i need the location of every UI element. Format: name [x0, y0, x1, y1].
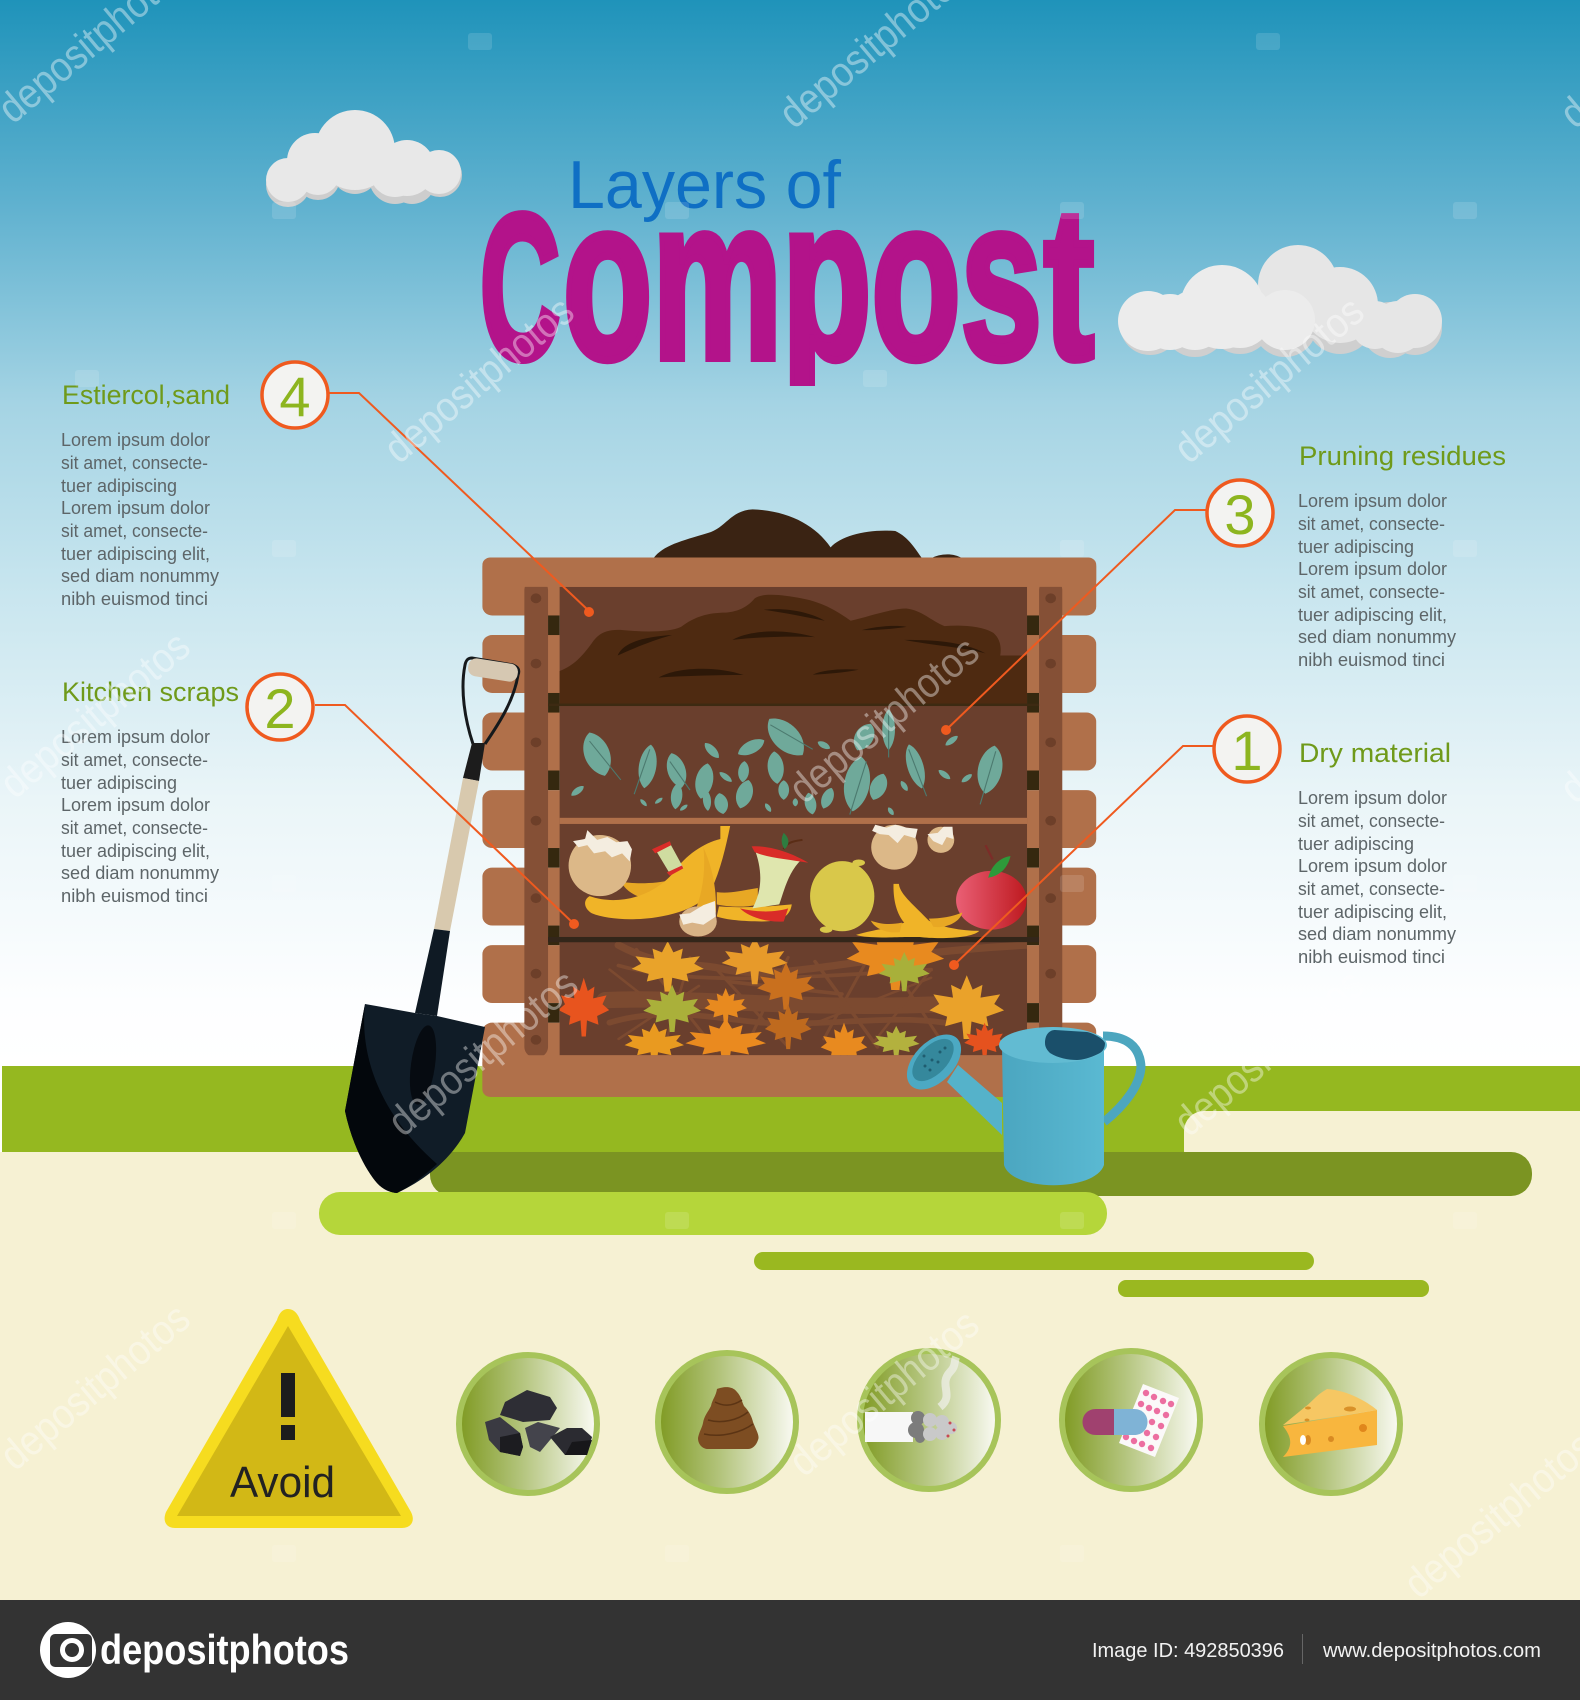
- badge 4: 4: [279, 365, 311, 428]
- apple: [956, 845, 1027, 930]
- callouts: leader lines and number badges: [247, 362, 1280, 969]
- avoid icon: cigarette: [860, 1351, 998, 1489]
- stock watermarks: depositphotos: [1165, 960, 1373, 1145]
- cloud right: [1118, 245, 1442, 358]
- leader 4: [329, 393, 593, 616]
- layer 1: dry material: [560, 942, 1027, 1056]
- stock watermarks: depositphotos: [379, 960, 587, 1145]
- can body: [1002, 1046, 1104, 1185]
- inner rails with gap blocks: [548, 615, 1039, 1023]
- wood bottom plank over interior: [482, 1055, 1096, 1097]
- avoid label: Avoid: [230, 1458, 335, 1507]
- footer logo wordmark: depositphotos: [100, 1626, 349, 1673]
- body: Lorem ipsum dolor: [1298, 559, 1447, 579]
- can opening: [1045, 1030, 1105, 1060]
- body: Lorem ipsum dolor: [1298, 788, 1447, 808]
- layer dividers: [548, 704, 1039, 942]
- body: Lorem ipsum dolor: [61, 430, 210, 450]
- title line: Compost: t: [1044, 162, 1094, 404]
- footer bar: [0, 1600, 1580, 1700]
- body: sit amet, consecte-: [1298, 582, 1445, 602]
- stock watermarks: depositphotos: [780, 1300, 988, 1485]
- body: Lorem ipsum dolor: [61, 727, 210, 747]
- body: sit amet, consecte-: [1298, 811, 1445, 831]
- apple core large: [740, 833, 808, 922]
- layer 4: estiercol and sand: [560, 595, 1027, 704]
- exclamation mark: [281, 1373, 295, 1440]
- sky background: [0, 0, 1580, 1066]
- shovel D-handle: [463, 658, 519, 744]
- body: tuer adipiscing: [61, 476, 177, 496]
- cloud left: [266, 110, 462, 207]
- body: nibh euismod tinci: [61, 589, 208, 609]
- badge 2: 2: [264, 677, 296, 740]
- text block: Kitchen scraps: [61, 677, 239, 906]
- shovel blade: [345, 1004, 485, 1193]
- heading: Estiercol,sand: [62, 380, 230, 410]
- stock watermarks: depositphotos: [375, 287, 583, 472]
- posts with bolts: [524, 579, 1062, 1058]
- shovel: [345, 657, 519, 1193]
- watering can: [897, 1024, 1141, 1185]
- layer 2: kitchen scraps: [569, 825, 1027, 938]
- heading: Dry material: [1299, 738, 1451, 768]
- badge 3: 3: [1224, 483, 1256, 546]
- title line: Layers of: Layers of: [568, 147, 841, 223]
- apple core small: [652, 841, 683, 876]
- image id: Image ID: 492850396: [1092, 1640, 1284, 1662]
- body: nibh euismod tinci: [1298, 947, 1445, 967]
- compost bin: [482, 509, 1096, 1097]
- body: tuer adipiscing: [1298, 834, 1414, 854]
- leader 1: [950, 746, 1213, 969]
- leader 2: [315, 705, 578, 928]
- body: Lorem ipsum dolor: [61, 795, 210, 815]
- body: Lorem ipsum dolor: [61, 498, 210, 518]
- body: nibh euismod tinci: [1298, 650, 1445, 670]
- body: sit amet, consecte-: [61, 453, 208, 473]
- body: sit amet, consecte-: [1298, 879, 1445, 899]
- website: www.depositphotos.com: [1322, 1640, 1541, 1662]
- body: sed diam nonummy: [61, 566, 219, 586]
- wooden slats: [482, 558, 1096, 1097]
- egg shell top right: [871, 825, 918, 870]
- heading: Kitchen scraps: [62, 677, 239, 707]
- can rose: [897, 1024, 971, 1100]
- body: [61, 430, 219, 609]
- body: tuer adipiscing elit,: [61, 841, 210, 861]
- badge 3: [1207, 480, 1273, 546]
- body: tuer adipiscing: [1298, 537, 1414, 557]
- egg shell large: [569, 830, 632, 896]
- can handle: [1103, 1036, 1141, 1122]
- body: [1298, 788, 1456, 967]
- banana peel large: [585, 826, 792, 921]
- compost heap above bin: [653, 509, 962, 558]
- title line: Compost: C: [480, 172, 560, 402]
- banana peel small: [856, 884, 979, 938]
- branch tangle: [605, 945, 1027, 1051]
- body: tuer adipiscing elit,: [61, 544, 210, 564]
- body: [1298, 491, 1456, 670]
- title: [482, 159, 1095, 386]
- badge 1: 1: [1231, 719, 1263, 782]
- body: sed diam nonummy: [1298, 627, 1456, 647]
- badge 4: [262, 362, 328, 428]
- body: sit amet, consecte-: [61, 818, 208, 838]
- body: tuer adipiscing elit,: [1298, 902, 1447, 922]
- body: Lorem ipsum dolor: [1298, 856, 1447, 876]
- maple leaves: [558, 921, 1005, 1068]
- stock watermarks: depositphotos: [780, 627, 988, 812]
- text block: Dry material: [1298, 738, 1456, 967]
- body: tuer adipiscing: [61, 773, 177, 793]
- avoid icon: coal: [459, 1355, 597, 1493]
- heading: Pruning residues: [1299, 441, 1506, 471]
- leader 3: [942, 510, 1206, 734]
- body: Lorem ipsum dolor: [1298, 491, 1447, 511]
- body: sit amet, consecte-: [61, 750, 208, 770]
- text block: Estiercol, sand: [61, 380, 230, 609]
- title line: Compost: [482, 210, 1095, 386]
- shovel grip: [467, 657, 519, 683]
- lemon: [810, 859, 874, 933]
- bin interior: [560, 587, 1027, 1055]
- text block: Pruning residues: [1298, 441, 1506, 670]
- layer 3: pruning residue leaves: [569, 709, 1006, 816]
- small egg shell front: [679, 901, 717, 937]
- stock watermarks: depositphotos: [1165, 287, 1373, 472]
- avoid icon: dung: [658, 1353, 796, 1491]
- avoid icon: cheese: [1262, 1355, 1400, 1493]
- avoid icon: medicine: [1062, 1351, 1200, 1489]
- ground: grass and sand: [0, 1066, 1580, 1600]
- title line: Compost: ompos: [563, 150, 1042, 407]
- badge 2: [247, 674, 313, 740]
- body: sit amet, consecte-: [1298, 514, 1445, 534]
- footer logo icon: [40, 1622, 96, 1678]
- body: tuer adipiscing elit,: [1298, 605, 1447, 625]
- wood top plank: [482, 558, 1096, 587]
- body: sed diam nonummy: [61, 863, 219, 883]
- body: sed diam nonummy: [1298, 924, 1456, 944]
- shovel shaft: [463, 743, 485, 781]
- egg shell small top right: [927, 827, 954, 853]
- body: sit amet, consecte-: [61, 521, 208, 541]
- can spout: [947, 1065, 1002, 1135]
- body: nibh euismod tinci: [61, 886, 208, 906]
- body: [61, 727, 219, 906]
- avoid warning triangle: [165, 1309, 413, 1528]
- badge 1: [1214, 716, 1280, 782]
- footer divider: [1302, 1634, 1303, 1664]
